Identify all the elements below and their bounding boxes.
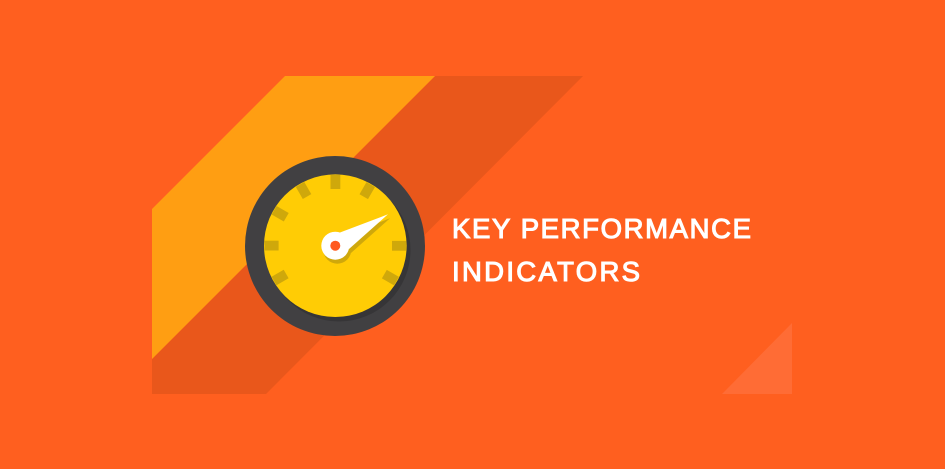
gauge tick marks bbox=[265, 175, 406, 285]
needle bbox=[321, 214, 388, 260]
amber diagonal band bbox=[152, 76, 435, 359]
gauge outer ring bbox=[245, 156, 425, 336]
light corner triangle bbox=[722, 323, 792, 394]
needle hub bbox=[330, 241, 340, 251]
gauge yellow dial bbox=[264, 174, 407, 317]
title bbox=[452, 213, 751, 287]
gauge inner shadow bbox=[268, 178, 410, 322]
title line 1: KEY PERFORMANCE bbox=[452, 213, 751, 244]
icon: gauge bbox=[245, 156, 425, 336]
dark orange diagonal band bbox=[152, 76, 583, 394]
needle shadow bbox=[323, 218, 390, 264]
title line 2: INDICATORS bbox=[452, 256, 640, 287]
